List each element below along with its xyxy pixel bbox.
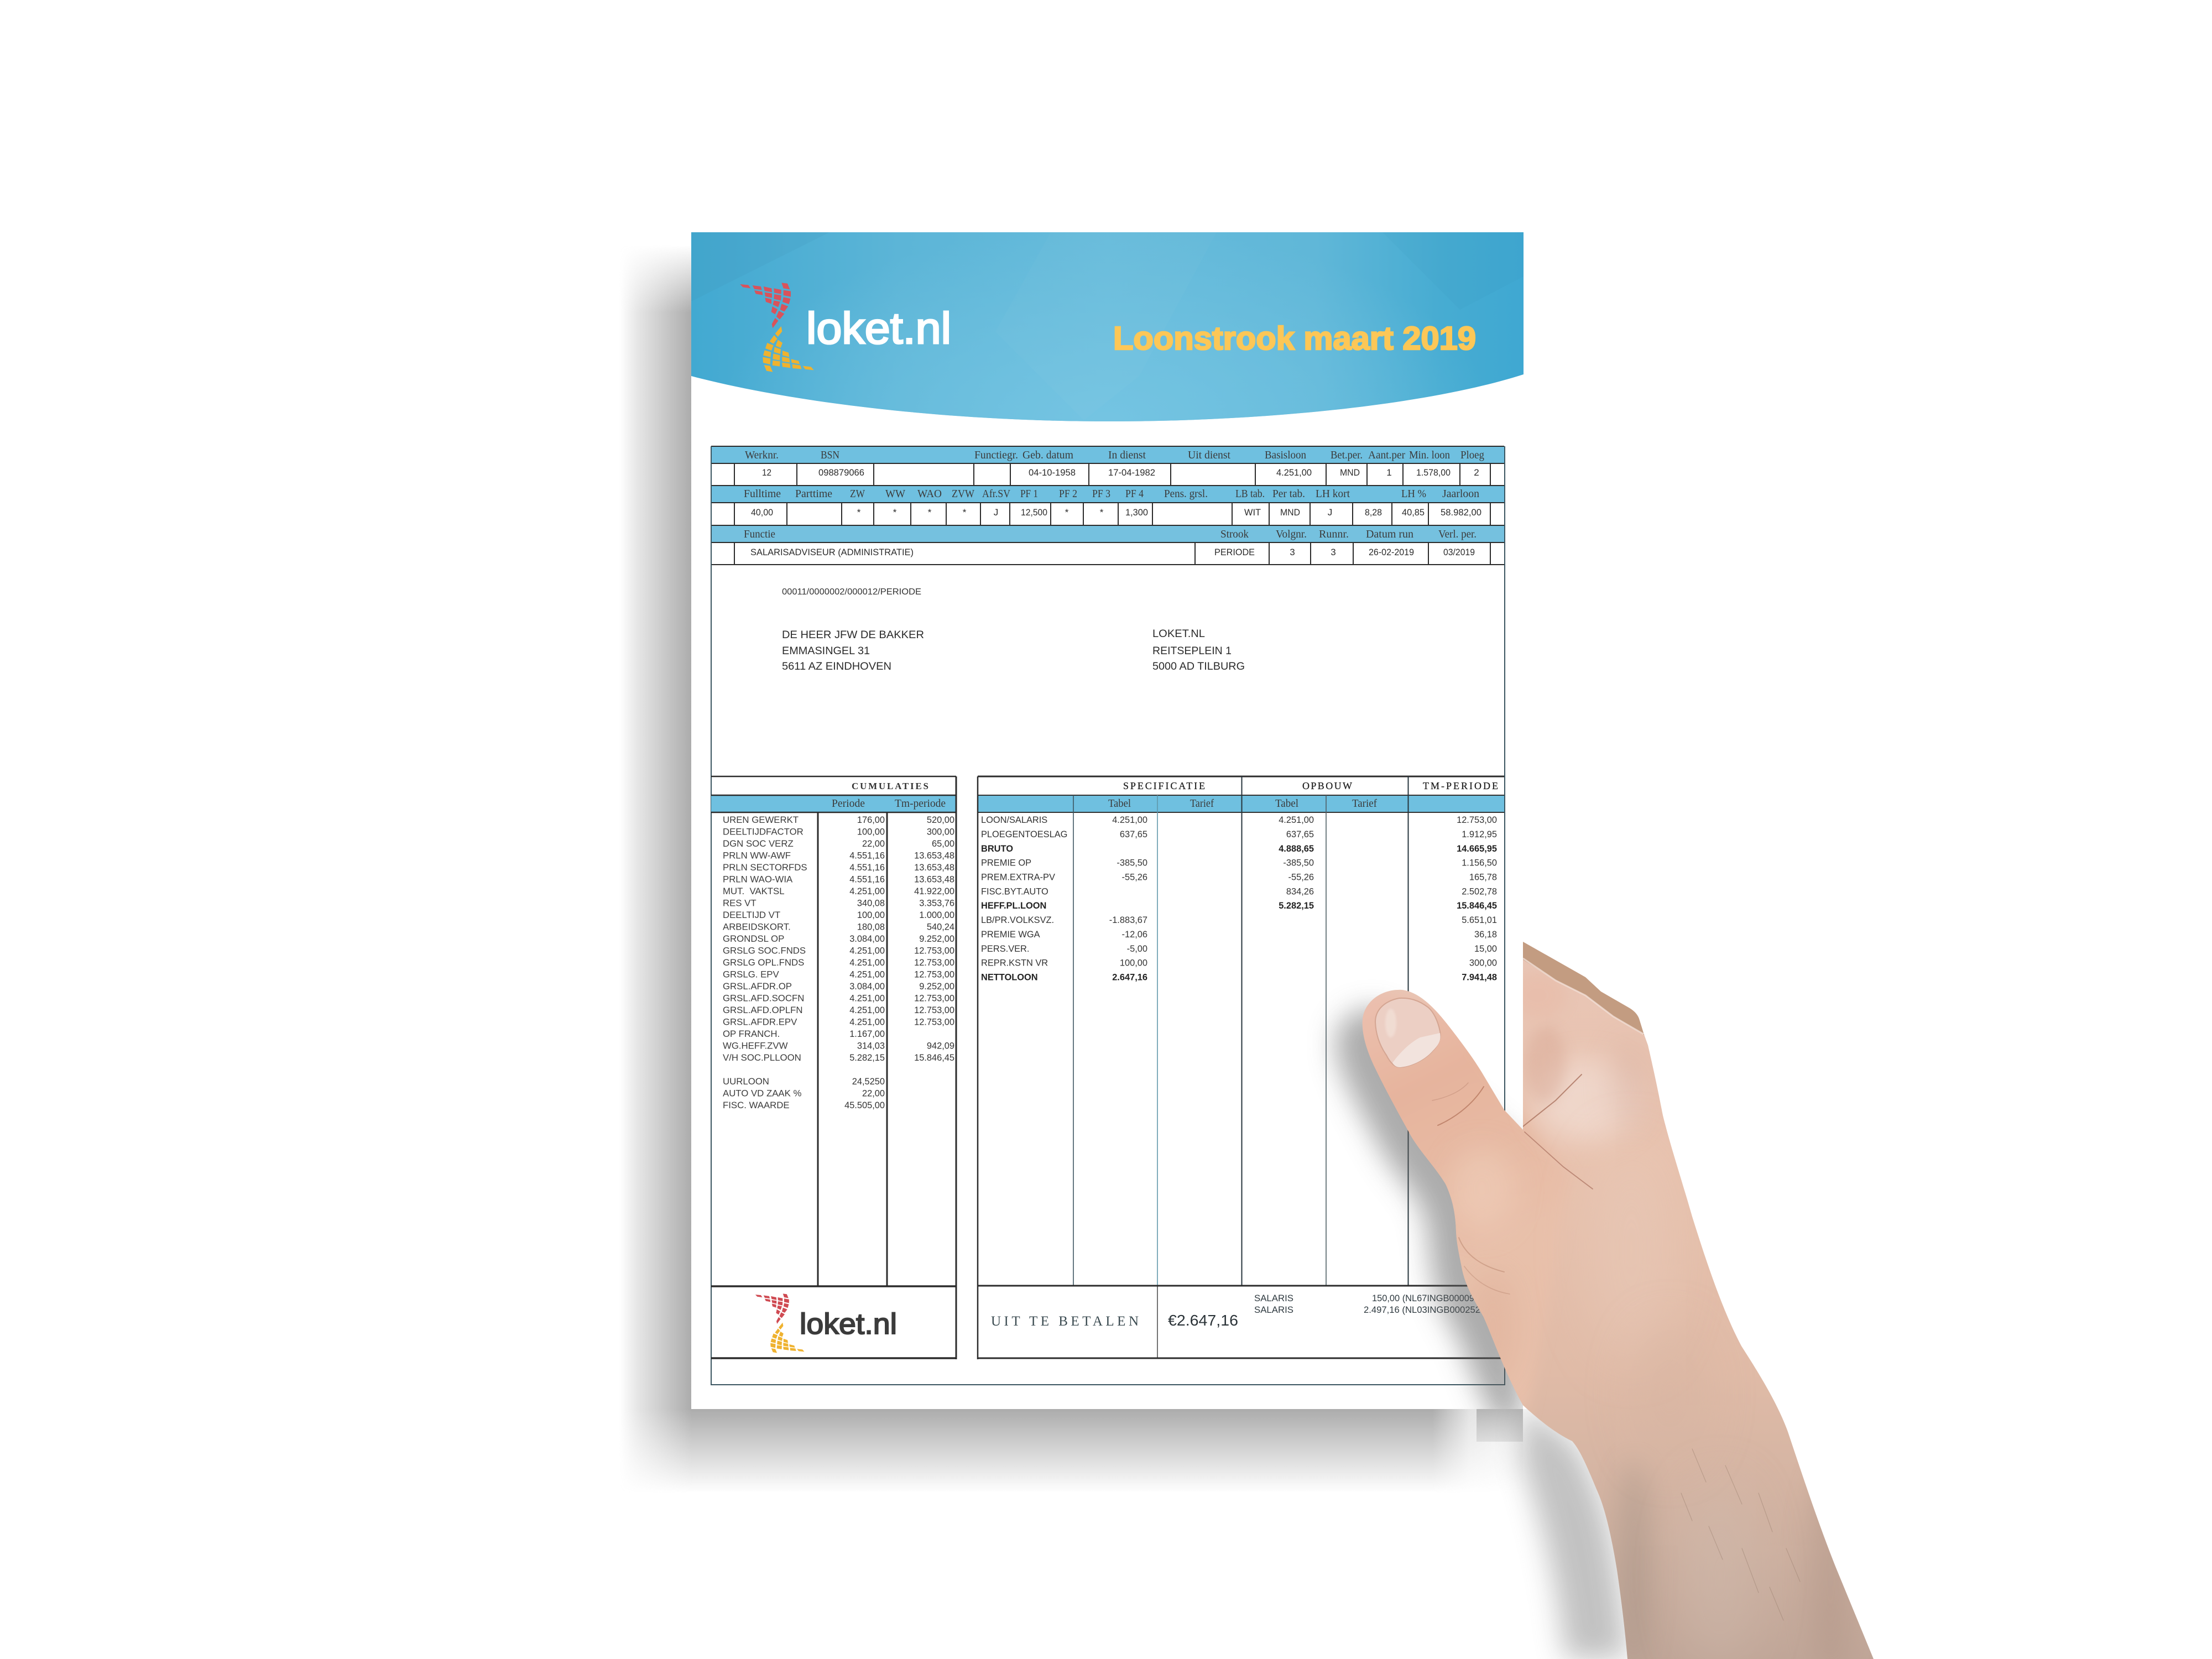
title: Loonstrook maart 2019	[1113, 320, 1476, 357]
net amount: €2.647,16	[1168, 1312, 1238, 1329]
column heads: cumulaties: Periode	[832, 797, 865, 810]
labels: specificatie: PREMIE WGA	[981, 930, 1040, 940]
values: specificatie tabel: 2.647,16	[1112, 972, 1147, 982]
labels: specificatie: BRUTO	[981, 844, 1013, 854]
values: periode: 3.084,00	[849, 934, 885, 944]
labels: specificatie: FISC.BYT.AUTO	[981, 887, 1048, 897]
values: opbouw tabel	[1279, 815, 1314, 911]
column heads: cumulaties: Tm-periode	[895, 797, 946, 810]
address: employee: DE HEER JFW DE BAKKER	[782, 629, 924, 641]
payment lines: 2.497,16 (NL03INGB000252	[1364, 1305, 1480, 1315]
header labels row 1: Functiegr.	[974, 449, 1018, 461]
values row 2: WIT	[1244, 507, 1261, 518]
header labels row 2: LH %	[1401, 488, 1426, 500]
values row 2: 58.982,00	[1441, 507, 1481, 518]
header labels row 1: Basisloon	[1265, 449, 1306, 461]
values row 2: J	[994, 507, 998, 518]
values: tm-periode: 15,00	[1474, 944, 1497, 954]
labels: cumulaties: PRLN WAO-WIA	[723, 874, 793, 885]
values: opbouw tabel: 637,65	[1286, 830, 1314, 839]
values: periode: 1.167,00	[849, 1029, 885, 1039]
values: specificatie tabel: 637,65	[1120, 830, 1147, 839]
values: tm-periode: 65,00	[932, 839, 954, 849]
address: employee: 5611 AZ EINDHOVEN	[782, 660, 891, 672]
values: specificatie tabel: -5,00	[1127, 944, 1147, 954]
header labels row 2: ZW	[850, 488, 865, 500]
labels: cumulaties: GRSL.AFD.OPLFN	[723, 1005, 803, 1015]
values: opbouw tabel: 834,26	[1286, 887, 1314, 897]
values: tm-periode: 2.502,78	[1462, 887, 1497, 897]
labels: cumulaties: MUT. VAKTSL	[723, 886, 785, 896]
labels: cumulaties: UURLOON	[723, 1076, 769, 1087]
header labels row 2: WAO	[917, 488, 942, 500]
values: specificatie tabel: -12,06	[1122, 930, 1147, 940]
values: periode: 180,08	[857, 922, 885, 932]
values: tm-periode: 540,24	[927, 922, 954, 932]
values row 1: 1.578,00	[1416, 467, 1451, 478]
column heads: tabel and tarief	[1108, 797, 1377, 810]
labels: specificatie: PREM.EXTRA-PV	[981, 873, 1055, 883]
payment lines: 150,00 (NL67INGB00009	[1372, 1293, 1474, 1303]
address: employer: LOKET.NL	[1152, 628, 1205, 640]
labels: cumulaties: UREN GEWERKT	[723, 815, 799, 825]
header labels row 1: Ploeg	[1460, 449, 1484, 461]
values: opbouw tabel: 4.888,65	[1279, 844, 1314, 854]
values: periode: 3.084,00	[849, 982, 885, 992]
address: employer: 5000 AD TILBURG	[1152, 660, 1245, 672]
values: periode: 4.251,00	[849, 970, 885, 980]
labels: specificatie: NETTOLOON	[981, 972, 1038, 982]
values: specificatie tabel: 4.251,00	[1112, 815, 1147, 825]
values row 1: MND	[1340, 467, 1360, 478]
values: tm-periode: 165,78	[1469, 873, 1497, 883]
values: opbouw tabel: -55,26	[1288, 873, 1314, 883]
logo: loket.nl mark, header	[740, 283, 814, 372]
values row 2: 12,500	[1021, 507, 1047, 518]
values row 2: *	[963, 507, 967, 518]
labels: cumulaties: AUTO VD ZAAK %	[723, 1088, 801, 1098]
paper sheet	[691, 232, 1524, 1409]
values row 3: 3	[1331, 547, 1336, 557]
values row 1: 2	[1474, 467, 1479, 478]
labels: specificatie	[981, 815, 1067, 982]
values: tm-periode	[914, 815, 954, 1063]
values: periode: 4.251,00	[849, 1005, 885, 1015]
fold highlight	[1523, 958, 1644, 1034]
hand shadow on paper	[1336, 1009, 1522, 1424]
header labels row 2: PF 4	[1125, 488, 1144, 500]
header labels row 1: In dienst	[1108, 449, 1146, 461]
values: tm-periode: 36,18	[1474, 930, 1497, 940]
values: periode: 314,03	[857, 1041, 885, 1051]
labels: specificatie: PREMIE OP	[981, 858, 1031, 868]
header labels row 1: Uit dienst	[1188, 449, 1230, 461]
values row 1: 12	[762, 467, 771, 478]
header labels row 2: PF 1	[1020, 488, 1038, 500]
labels: cumulaties: DEELTIJDFACTOR	[723, 826, 804, 837]
values: periode: 340,08	[857, 898, 885, 908]
logo wordmark, header: loket.nl	[806, 304, 951, 353]
header labels row 1: Aant.per	[1368, 449, 1405, 461]
values row 3: 26-02-2019	[1369, 547, 1414, 557]
values: tm-periode: 942,09	[927, 1041, 954, 1051]
values: periode: 176,00	[857, 815, 885, 825]
values: periode: 22,00	[862, 1088, 885, 1098]
header labels row 2: Jaarloon	[1442, 488, 1479, 500]
header labels row 2: Afr.SV	[982, 488, 1010, 500]
headings: specificatie, opbouw, tm-periode: SPECIFICATIE	[1123, 780, 1205, 791]
values: tm-periode: 520,00	[927, 815, 954, 825]
values: tm-periode: 41.922,00	[914, 886, 954, 896]
values: tm-periode: 15.846,45	[914, 1053, 954, 1063]
values row 2: *	[857, 507, 861, 518]
header labels row 2: Fulltime	[744, 488, 781, 500]
shadow tab at lower right of paper	[1477, 1409, 1523, 1442]
payment lines	[1254, 1293, 1480, 1315]
values: periode: 4.251,00	[849, 886, 885, 896]
values: periode: 100,00	[857, 910, 885, 920]
values row 2: *	[1100, 507, 1104, 518]
values row 2: *	[928, 507, 932, 518]
values: periode: 22,00	[862, 839, 885, 849]
values row 3	[750, 547, 1475, 557]
payment lines: SALARIS	[1254, 1305, 1293, 1315]
header labels row 2: LB tab.	[1235, 488, 1265, 500]
values: tm-periode: 9.252,00	[919, 982, 954, 992]
labels: specificatie: LOON/SALARIS	[981, 815, 1047, 825]
header labels row 2: PF 2	[1059, 488, 1077, 500]
labels: cumulaties: GRSL.AFD.SOCFN	[723, 993, 804, 1003]
address: employee: EMMASINGEL 31	[782, 645, 870, 657]
skin shading	[1349, 972, 1853, 1659]
values: tm-periode: 1.912,95	[1462, 830, 1497, 839]
values row 2: MND	[1280, 507, 1300, 518]
labels: cumulaties: WG.HEFF.ZVW	[723, 1041, 788, 1051]
values: periode: 4.251,00	[849, 946, 885, 956]
values: periode: 24,5250	[852, 1077, 885, 1087]
values: tm-periode: 1.000,00	[919, 910, 954, 920]
hand	[1349, 940, 1874, 1659]
values: tm-periode: 13.653,48	[914, 863, 954, 873]
values: tm-periode: 12.753,00	[914, 970, 954, 980]
values: specificatie tabel: -1.883,67	[1109, 915, 1147, 925]
labels: cumulaties: FISC. WAARDE	[723, 1100, 790, 1110]
values: specificatie tabel: -55,26	[1122, 873, 1147, 883]
values row 2: *	[1065, 507, 1069, 518]
values row 1	[762, 467, 1479, 478]
thumbnail	[1375, 998, 1441, 1067]
values: periode: 4.251,00	[849, 993, 885, 1003]
employee data table	[711, 446, 1504, 565]
headings: specificatie, opbouw, tm-periode: OPBOUW	[1302, 780, 1352, 791]
values: tm-periode: 12.753,00	[914, 993, 954, 1003]
values: opbouw tabel: -385,50	[1283, 858, 1314, 868]
labels: cumulaties: ARBEIDSKORT.	[723, 921, 791, 932]
values row 1: 17-04-1982	[1108, 467, 1155, 478]
labels: cumulaties: PRLN WW-AWF	[723, 851, 791, 860]
values: tm-periode: 12.753,00	[914, 946, 954, 956]
values row 1: 1	[1386, 467, 1392, 478]
values: periode: 4.551,16	[849, 851, 885, 860]
values: specificatie tabel: -385,50	[1117, 858, 1147, 868]
values: tm-periode: 15.846,45	[1457, 901, 1497, 911]
heading: cumulaties: CUMULATIES	[852, 781, 928, 791]
header labels row 2: PF 3	[1092, 488, 1110, 500]
values row 1: 098879066	[818, 467, 864, 478]
values: tm-periode: 13.653,48	[914, 875, 954, 885]
header labels row 3: Datum run	[1366, 528, 1413, 540]
header labels row 2: Per tab.	[1272, 488, 1305, 500]
labels: cumulaties: GRSLG OPL.FNDS	[723, 957, 804, 968]
header labels row 1: Min. loon	[1409, 449, 1450, 461]
header labels row 3: Functie	[744, 528, 775, 540]
labels: cumulaties: DEELTIJD VT	[723, 910, 780, 920]
labels: cumulaties: PRLN SECTORFDS	[723, 862, 807, 873]
values: tm-periode: 14.665,95	[1457, 844, 1497, 854]
header labels row 3: Runnr.	[1319, 528, 1349, 540]
column heads: tabel and tarief: Tarief	[1190, 797, 1214, 810]
labels: specificatie: LB/PR.VOLKSVZ.	[981, 915, 1054, 925]
values: periode: 45.505,00	[844, 1100, 885, 1110]
header labels row 3	[744, 528, 1477, 540]
address: employee	[782, 629, 924, 672]
labels: cumulaties: GRSLG. EPV	[723, 969, 779, 980]
address: employer: REITSEPLEIN 1	[1152, 645, 1232, 657]
values row 1: 4.251,00	[1276, 467, 1312, 478]
values: tm-periode: 12.753,00	[914, 1005, 954, 1015]
values: tm-periode: 12.753,00	[914, 1018, 954, 1027]
values: tm-periode: 1.156,50	[1462, 858, 1497, 868]
values: periode: 4.551,16	[849, 863, 885, 873]
values: periode: 4.251,00	[849, 1018, 885, 1027]
headings: specificatie, opbouw, tm-periode: TM-PERIODE	[1423, 780, 1498, 791]
reference code: 00011/0000002/000012/PERIODE	[782, 587, 921, 597]
logo: footer	[755, 1293, 897, 1353]
outer frame of the pay slip	[711, 446, 1505, 1385]
labels: cumulaties: RES VT	[723, 898, 757, 908]
values row 2: J	[1328, 507, 1332, 518]
values row 2: 40,00	[751, 507, 773, 518]
header labels row 2: WW	[885, 488, 906, 500]
labels: specificatie: HEFF.PL.LOON	[981, 901, 1046, 911]
header labels row 3: Volgnr.	[1276, 528, 1307, 540]
values: periode: 4.251,00	[849, 958, 885, 968]
values: tm-periode: 9.252,00	[919, 934, 954, 944]
header labels row 3: Verl. per.	[1438, 528, 1477, 540]
values: tm-periode: 13.653,48	[914, 851, 954, 860]
values: tm-periode: 5.651,01	[1462, 915, 1497, 925]
header labels row 1: BSN	[821, 449, 839, 461]
labels: specificatie: PLOEGENTOESLAG	[981, 830, 1067, 839]
header labels row 2: ZVW	[952, 488, 975, 500]
header labels row 2: Pens. grsl.	[1164, 488, 1208, 500]
paper drop shadow	[619, 245, 1523, 1493]
labels: cumulaties: OP FRANCH.	[723, 1029, 780, 1039]
header labels row 3: Strook	[1220, 528, 1249, 540]
values row 3: SALARISADVISEUR (ADMINISTRATIE)	[750, 547, 914, 557]
values: tm-periode: 300,00	[1469, 958, 1497, 968]
values: specificatie tabel: 100,00	[1120, 958, 1147, 968]
skin creases	[1432, 1074, 1800, 1620]
column heads: tabel and tarief: Tarief	[1352, 797, 1377, 810]
values row 3: PERIODE	[1214, 547, 1255, 557]
labels: cumulaties: GRSLG SOC.FNDS	[723, 946, 806, 956]
values: opbouw tabel: 4.251,00	[1279, 815, 1314, 825]
column heads: tabel and tarief: Tabel	[1108, 797, 1131, 810]
values: periode	[844, 815, 885, 1110]
values row 1: 04-10-1958	[1029, 467, 1076, 478]
header banner	[691, 232, 1524, 421]
values row 2	[751, 507, 1481, 518]
values: tm-periode: 12.753,00	[914, 958, 954, 968]
values: periode: 4.551,16	[849, 875, 885, 885]
payment lines: SALARIS	[1254, 1293, 1293, 1303]
panel: specificatie, opbouw, tm-periode	[978, 776, 1505, 1359]
values: opbouw tabel: 5.282,15	[1279, 901, 1314, 911]
panel: cumulaties	[711, 776, 957, 1359]
labels: cumulaties: GRSL.AFDR.OP	[723, 981, 792, 992]
values row 3: 3	[1290, 547, 1295, 557]
labels: cumulaties	[723, 815, 807, 1110]
values: tm-periode: 12.753,00	[1457, 815, 1497, 825]
values: periode: 5.282,15	[849, 1053, 885, 1063]
labels: cumulaties: GRSL.AFDR.EPV	[723, 1016, 797, 1027]
labels: cumulaties: GRONDSL OP	[723, 933, 784, 944]
values: tm-periode: 300,00	[927, 827, 954, 837]
values row 2: *	[893, 507, 897, 518]
values row 3: 03/2019	[1443, 547, 1475, 557]
header labels row 1: Bet.per.	[1331, 449, 1363, 461]
header labels row 2	[744, 488, 1479, 500]
values: specificatie tabel	[1109, 815, 1147, 982]
column heads: tabel and tarief: Tabel	[1275, 797, 1298, 810]
column heads: cumulaties	[832, 797, 946, 810]
header labels row 1: Werknr.	[745, 449, 779, 461]
header labels row 1: Geb. datum	[1022, 449, 1073, 461]
labels: specificatie: REPR.KSTN VR	[981, 958, 1048, 968]
header labels row 1	[745, 449, 1484, 461]
uit te betalen label: UIT TE BETALEN	[991, 1314, 1139, 1329]
forearm shadow on background	[1521, 1405, 1627, 1659]
values row 2: 8,28	[1365, 507, 1382, 518]
labels: cumulaties: DGN SOC VERZ	[723, 838, 794, 849]
values: periode: 100,00	[857, 827, 885, 837]
values: tm-periode: 3.353,76	[919, 898, 954, 908]
finger fold band	[1521, 940, 1645, 1035]
values row 2: 40,85	[1402, 507, 1425, 518]
values row 2: 1,300	[1125, 507, 1148, 518]
headings: specificatie, opbouw, tm-periode	[1123, 780, 1498, 791]
labels: cumulaties: V/H SOC.PLLOON	[723, 1052, 801, 1063]
values: tm-periode	[1457, 815, 1497, 982]
logo: footer: loket.nl	[800, 1308, 897, 1340]
labels: specificatie: PERS.VER.	[981, 944, 1029, 954]
address: employer	[1152, 628, 1245, 672]
header labels row 2: Parttime	[795, 488, 832, 500]
header labels row 2: LH kort	[1316, 488, 1350, 500]
values: tm-periode: 7.941,48	[1462, 972, 1497, 982]
